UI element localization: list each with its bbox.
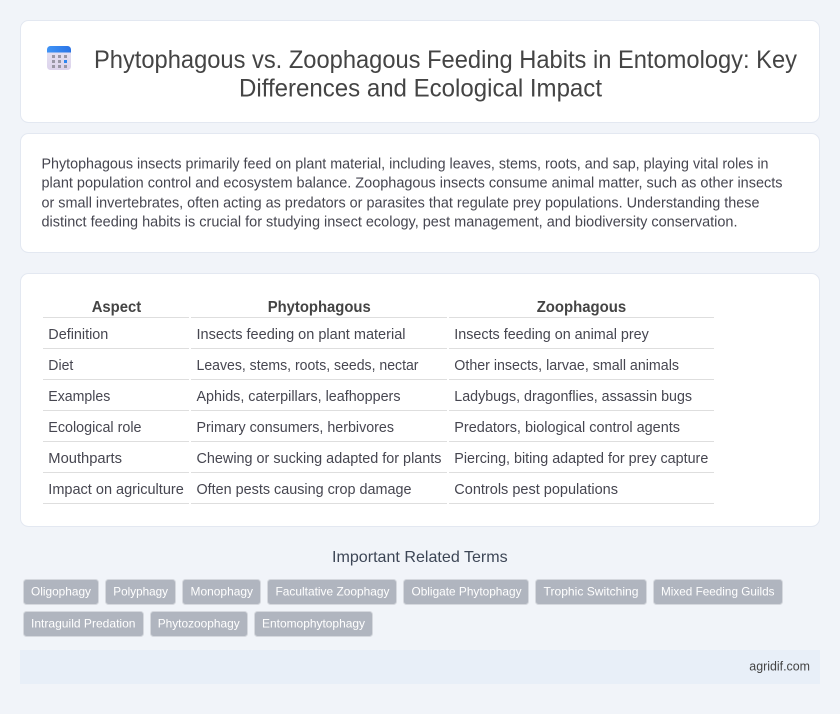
tag: Entomophytophagy xyxy=(254,612,372,636)
heading: title: Differences and Ecological Impact xyxy=(239,74,602,102)
table row: ecological role: Predators, biological control agents xyxy=(454,420,680,436)
tag: Obligate Phytophagy xyxy=(404,580,528,604)
tag: Trophic Switching xyxy=(536,580,646,604)
table row: diet xyxy=(48,358,679,374)
table row: ecological role: Primary consumers, herbivores xyxy=(196,420,394,436)
footer bar xyxy=(20,650,820,684)
table row: impact on agriculture: Impact on agriculture xyxy=(48,482,184,498)
table row: mouthparts xyxy=(48,451,708,467)
table row: definition xyxy=(48,327,650,343)
table row: mouthparts: Mouthparts xyxy=(48,451,122,467)
table header xyxy=(92,299,626,316)
table row: diet: Other insects, larvae, small animals xyxy=(454,358,679,374)
tag: Oligophagy: Oligophagy xyxy=(31,585,91,599)
table row: mouthparts: Chewing or sucking adapted for plants xyxy=(196,451,442,467)
text block: description: Phytophagous insects primarily feed on plant material, including leaves, stems, roots, and sap, playing vital roles in xyxy=(42,156,768,172)
tag list: related terms xyxy=(24,580,782,636)
table row: examples xyxy=(48,389,692,405)
icon: calendar xyxy=(47,46,71,70)
tag: Entomophytophagy: Entomophytophagy xyxy=(262,617,365,631)
table row: impact on agriculture xyxy=(48,482,618,498)
tag: Facultative Zoophagy: Facultative Zoophagy xyxy=(276,585,390,599)
table row: definition: Insects feeding on plant material xyxy=(196,327,406,343)
table header: Zoophagous xyxy=(537,299,626,316)
heading: title: Phytophagous vs. Zoophagous Feeding Habits in Entomology: Key xyxy=(94,46,797,74)
tag: Facultative Zoophagy xyxy=(268,580,396,604)
text block: description: distinct feeding habits is crucial for studying insect ecology, pest management, and biodiversity conservation. xyxy=(42,215,738,231)
table row: impact on agriculture: Often pests causing crop damage xyxy=(196,482,412,498)
tag: Obligate Phytophagy: Obligate Phytophagy xyxy=(412,585,522,599)
table row: ecological role: Ecological role xyxy=(48,420,141,436)
tag: Intraguild Predation xyxy=(24,612,144,636)
table row: examples: Examples xyxy=(48,389,110,405)
tag: Monophagy xyxy=(182,580,260,604)
table row: mouthparts: Piercing, biting adapted for prey capture xyxy=(454,451,708,467)
tag: Oligophagy xyxy=(24,580,98,604)
heading: title xyxy=(94,46,797,102)
table header: Phytophagous xyxy=(268,299,371,316)
panel: comparison table xyxy=(20,274,820,526)
tag: Polyphagy xyxy=(106,580,176,604)
panel: title card xyxy=(20,20,820,122)
tag: Phytozoophagy xyxy=(150,612,248,636)
text block: description: or small invertebrates, often acting as predators or parasites that regulate prey populations. Understanding these xyxy=(42,195,760,211)
table row: examples: Ladybugs, dragonflies, assassin bugs xyxy=(454,389,692,405)
table row: definition: Insects feeding on animal prey xyxy=(454,327,650,343)
tag: Phytozoophagy: Phytozoophagy xyxy=(158,617,240,631)
tag: Mixed Feeding Guilds: Mixed Feeding Guilds xyxy=(661,585,774,599)
tag: Monophagy: Monophagy xyxy=(190,585,253,599)
text block: description: plant population control and ecosystem balance. Zoophagous insects consume animal matter, such as other insects xyxy=(42,176,782,192)
table row: impact on agriculture: Controls pest populations xyxy=(454,482,618,498)
tag: Mixed Feeding Guilds xyxy=(654,580,782,604)
footer text: source: agridif.com xyxy=(749,659,810,674)
table row: diet: Leaves, stems, roots, seeds, nectar xyxy=(196,358,419,374)
table header: Aspect xyxy=(92,299,142,316)
panel: introduction xyxy=(20,134,820,252)
tag: Trophic Switching: Trophic Switching xyxy=(544,585,638,599)
tag: Polyphagy: Polyphagy xyxy=(113,585,168,599)
table row: diet: Diet xyxy=(48,358,73,374)
table row: examples: Aphids, caterpillars, leafhoppers xyxy=(196,389,400,405)
tag: Intraguild Predation: Intraguild Predation xyxy=(31,617,136,631)
table row: definition: Definition xyxy=(48,327,108,343)
heading: important related terms: Important Related Terms xyxy=(332,549,508,566)
text block: description xyxy=(42,156,782,231)
table row: ecological role xyxy=(48,420,680,436)
